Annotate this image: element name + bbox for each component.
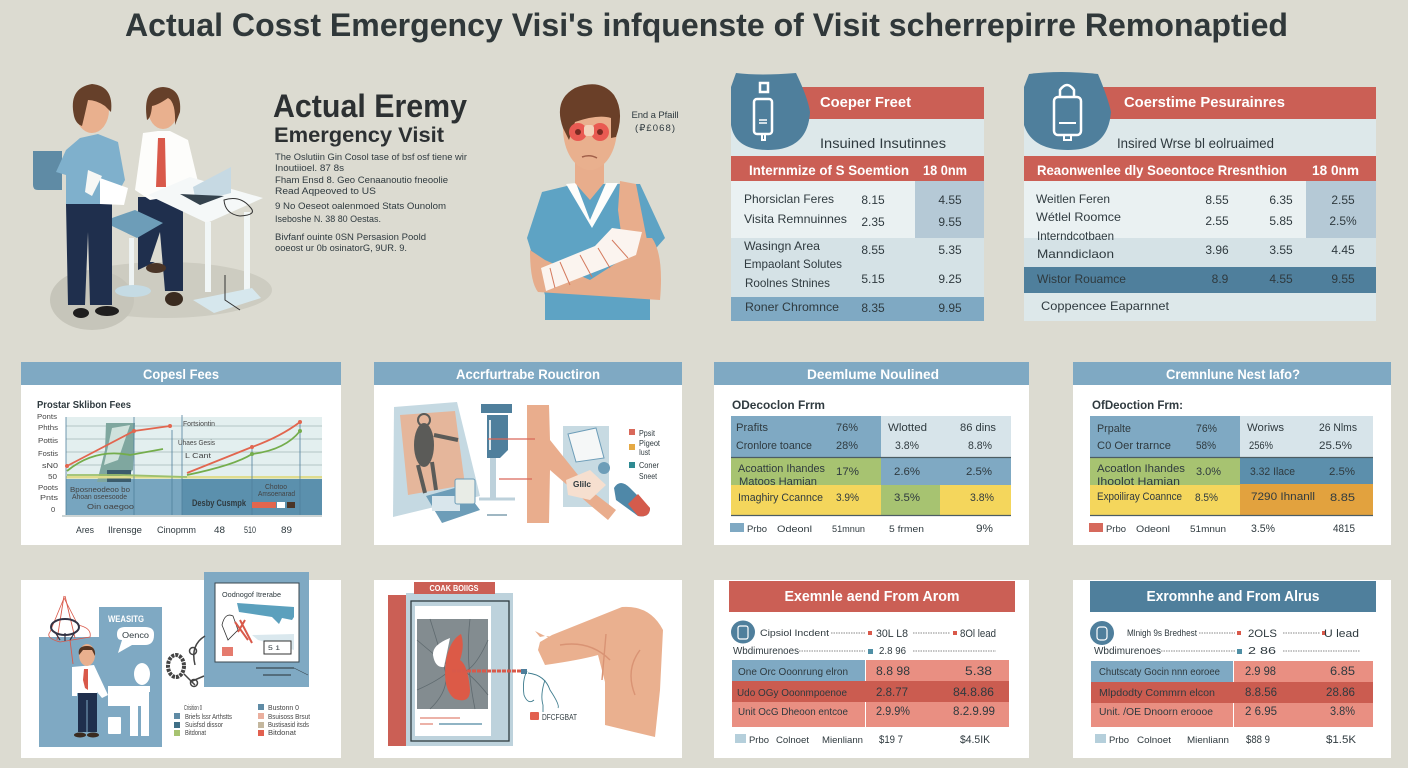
panel: coverage pressures table: Wétlel Roomce: [1036, 210, 1121, 224]
panel: example table blue: Mlpdodty Commrn elcon: [1099, 687, 1215, 699]
panel: coverage pressures table: Wistor Rouamce: [1037, 272, 1126, 286]
panel: deductible table right: 3.32 Ilace: [1250, 466, 1295, 478]
panel: coverage pressures table: 5.85: [1269, 214, 1293, 228]
panel: scan and arm illustration: [374, 580, 682, 758]
table legend: [1095, 734, 1357, 746]
panel: deductible table right: Cremnlune Nest Iafo?: [1166, 366, 1300, 382]
panel: deductible table left: ODecoclon Frrm: [732, 398, 825, 412]
panel: example table red: One Orc Ooonrung elron: [738, 666, 848, 678]
table legend: 51mnun: [1190, 524, 1226, 535]
illustration: scan document: [388, 582, 527, 746]
panel: deductible table left: 28%: [836, 440, 858, 452]
table legend: 9%: [976, 523, 993, 535]
panel: copper fees table: 5.35: [938, 243, 962, 257]
y axis labels: Pnts: [40, 493, 58, 502]
panel: copper fees table: 9.25: [938, 272, 962, 286]
line chart: Chotoo: [265, 482, 287, 491]
table legend: 5 frmen: [889, 524, 924, 535]
legend: Pigeot: [639, 438, 661, 448]
illustration: forearm: [535, 607, 663, 737]
panel: copper fees table: 9.55: [938, 215, 962, 229]
icon: tube: [523, 671, 558, 712]
panel: copper fees table: Coeper Freet: [820, 94, 911, 111]
panel: acute reaction illustration: [374, 362, 682, 545]
panel: example table red: 30L L8: [876, 628, 908, 640]
text block: description: [275, 152, 467, 253]
table legend: Mienliann: [1187, 735, 1229, 746]
panel: deductible table right: Prpalte: [1097, 423, 1131, 435]
panel: deductible table right: 76%: [1196, 423, 1217, 435]
panel: coverage pressures table: 3.96: [1205, 243, 1229, 257]
panel: deductible table left: 17%: [836, 466, 859, 478]
panel: example table blue: 28.86: [1326, 687, 1355, 699]
illustration: man at a sink: Oenco: [122, 630, 149, 640]
panel: deductible table right: 26 Nlms: [1319, 422, 1357, 434]
panel: example table blue: 2 6.95: [1245, 706, 1277, 718]
panel: copper fees table: 8.35: [861, 301, 885, 315]
icon: bag badge: [731, 620, 755, 644]
panel: deductible table left: [714, 362, 1029, 545]
panel: example table blue: Wbdimurenoes: [1094, 646, 1161, 657]
panel: example table red: 8Ol lead: [960, 628, 996, 640]
illustration: staff at a desk: [33, 84, 272, 330]
panel: deductible table left: Imaghiry Ccannce: [738, 492, 823, 504]
icon: chain link: [168, 636, 205, 686]
panel: deductible table left: 3.9%: [836, 492, 859, 504]
panel: coverage pressures table: 8.9: [1212, 272, 1229, 286]
panel: deductible table right: 25.5%: [1319, 440, 1352, 452]
panel: coverage pressures table: Reaonwenlee dly Soeontoce Rresnthion: [1037, 162, 1287, 178]
table legend: Odeonl: [777, 524, 812, 535]
table legend: Prbo: [1109, 735, 1129, 746]
illustration: arm: Glilc: [573, 479, 591, 489]
patient label: (₽£068): [635, 123, 675, 134]
x axis labels: 510: [244, 525, 256, 535]
panel: example table red: 2.9.9%: [876, 706, 910, 718]
y axis labels: Poots: [38, 483, 58, 492]
panel: coverage pressures table: 2.5%: [1329, 214, 1357, 228]
panel: deductible table right: 8.5%: [1195, 492, 1218, 504]
legend: Ppsit: [639, 428, 656, 438]
panel: example table red: Cipsiol Incdent: [760, 628, 829, 639]
panel: copper fees table: Internmize of S Soemtion: [749, 162, 909, 178]
table legend: Mienliann: [822, 735, 863, 746]
panel: example table blue: Mlnigh 9s Bredhest: [1127, 628, 1197, 639]
legend: Briefs lssr Arthstts: [185, 712, 232, 721]
line chart: Oin oaegoo: [87, 502, 134, 511]
panel: deductible table right: 2.5%: [1329, 466, 1355, 478]
panel: copay fees chart: Prostar Sklibon Fees: [37, 400, 131, 411]
panel: copper fees table: Visita Remnuinnes: [744, 212, 847, 226]
panel: deductible table left: 8.8%: [968, 440, 992, 452]
panel: example table blue: 8.8.56: [1245, 687, 1277, 699]
panel: deductible table left: 2.5%: [966, 466, 992, 478]
table legend: $4.5IK: [960, 734, 991, 746]
callout: [530, 712, 577, 722]
text block: description: 9 No Oeseot oalenmoed Stats Ounolom: [275, 201, 446, 211]
line chart: Bposneodeoo bo: [70, 485, 130, 494]
legend: Bitdonat: [185, 728, 207, 737]
legend: [629, 428, 661, 481]
icon: iv bag shield: [731, 73, 810, 150]
panel: deductible table left: Acoattion Ihandes: [738, 463, 825, 475]
panel: coverage pressures table: 18 0nm: [1312, 162, 1359, 178]
illustration: injured patient: [527, 84, 665, 320]
panel: example table blue: 3.8%: [1330, 706, 1355, 718]
heading: actual emergency visit: [273, 88, 467, 147]
panel: copay fees chart: [21, 362, 341, 545]
panel: example table red: Wbdimurenoes: [733, 646, 799, 657]
x axis labels: 89: [281, 525, 292, 535]
panel: coverage pressures table: Coerstime Pesurainres: [1124, 94, 1285, 111]
panel: example table red: Udo OGy Ooonmpoenoe: [737, 687, 847, 699]
panel: deductible table right: 7290 Ihnanll: [1251, 491, 1315, 503]
table legend: [1089, 523, 1355, 535]
panel: coverage pressures table: Insired Wrse bl eolruaimed: [1117, 135, 1274, 151]
table legend: 4815: [1333, 523, 1355, 535]
legend: Bustisasid itsds: [268, 720, 309, 729]
table legend: Prbo: [749, 735, 769, 746]
panel: deductible table left: 76%: [836, 422, 858, 434]
panel: deductible table left: Matoos Hamian: [739, 476, 817, 488]
panel: coverage pressures table: 4.55: [1269, 272, 1293, 286]
panel: deductible table right: C0 Oer trarnce: [1097, 440, 1171, 452]
panel: example table red: Exemnle aend From Arom: [784, 588, 960, 605]
panel: copper fees table: 18 0nm: [923, 162, 967, 178]
panel: coverage pressures table: 2.55: [1331, 193, 1355, 207]
line chart: L Cant: [185, 451, 212, 460]
y axis labels: Ponts: [37, 412, 57, 421]
panel: deductible table right: Woriws: [1247, 422, 1285, 434]
illustration: man at a sink: WEASITG: [108, 614, 144, 624]
x axis labels: 48: [214, 525, 225, 535]
panel: copper fees table: Insuined Insutinnes: [820, 135, 946, 151]
panel: copper fees table: Roner Chromnce: [745, 300, 839, 314]
illustration: man at a sink: [39, 596, 162, 747]
legend: [174, 703, 311, 737]
panel: deductible table left: Cronlore toance: [736, 440, 812, 452]
text block: description: Fham Ensd 8. Geo Cenaanoutio fneoolie: [275, 175, 448, 185]
table legend: [735, 734, 991, 746]
callout: DFCFGBAT: [542, 713, 577, 722]
panel: deductible table right: Acoatlon Ihandes: [1097, 463, 1186, 475]
panel: deductible table left: 3.8%: [895, 440, 919, 452]
panel: example table red: 8.8 98: [876, 666, 910, 678]
line chart: Amsoenarad: [258, 489, 295, 498]
panel: example table red: 84.8.86: [953, 687, 994, 699]
panel: example table red: Unit OcG Dheoon entcoe: [738, 706, 848, 718]
table legend: Colnoet: [1137, 735, 1171, 746]
y axis labels: sN0: [42, 461, 58, 470]
panel: deductible table right: 58%: [1196, 440, 1216, 452]
table legend: $19 7: [879, 734, 903, 746]
panel: coverage pressures table: 2.55: [1205, 214, 1229, 228]
heading: actual emergency visit: Actual Eremy: [273, 88, 467, 124]
legend: Sneet: [639, 471, 658, 481]
panel: person and chart illustration: [21, 572, 341, 758]
legend: Bustonn 0: [268, 703, 299, 712]
panel: deductible table left: Wlotted: [888, 422, 927, 434]
panel: copper fees table: Phorsiclan Feres: [744, 192, 834, 206]
panel: copper fees table: Roolnes Stnines: [745, 276, 830, 290]
panel: example table blue: Chutscaty Gocin nnn eoroee: [1099, 666, 1220, 678]
panel: deductible table left: Prafits: [736, 422, 768, 434]
x axis labels: Cinopmm: [157, 525, 196, 535]
panel: example table red: 2.8.77: [876, 687, 908, 699]
illustration: chart board: 5 1: [268, 646, 281, 652]
panel: copper fees table: 8.55: [861, 243, 885, 257]
panel: example table blue: [1073, 580, 1391, 758]
panel: copper fees table: 4.55: [938, 193, 962, 207]
illustration: chart board: [204, 572, 309, 687]
line chart: Fortsiontin: [183, 419, 215, 428]
x axis labels: [76, 525, 292, 535]
panel: coverage pressures table: 4.45: [1331, 243, 1355, 257]
panel: example table blue: Unit. /OE Dnoorn eroooe: [1099, 706, 1213, 718]
panel: example table blue: 2OLS: [1248, 628, 1277, 640]
panel: example table blue: 2.9 98: [1245, 666, 1276, 678]
panel: coverage pressures table: 8.55: [1205, 193, 1229, 207]
panel: example table blue: Exromnhe and From Alrus: [1146, 588, 1320, 605]
table legend: Colnoet: [776, 735, 809, 746]
panel: acute reaction illustration: Accrfurtrabe Rouctiron: [456, 366, 600, 382]
table legend: 51mnun: [832, 524, 865, 535]
panel: example table red: 5.38: [965, 666, 992, 678]
patient label: End a Pfaill: [632, 110, 678, 121]
panel: deductible table left: Deemlume Noulined: [807, 366, 939, 382]
panel: copper fees table: 5.15: [861, 272, 885, 286]
text block: description: Iseboshe N. 38 80 Oestas.: [275, 214, 381, 224]
table legend: Prbo: [1106, 524, 1126, 535]
panel: copper fees table: 2.35: [861, 215, 885, 229]
panel: example table blue: U lead: [1324, 628, 1359, 640]
line chart: [62, 415, 322, 516]
legend: Suisfsd dissor: [185, 720, 223, 729]
icon: bag badge: [1090, 621, 1114, 645]
panel: copper fees table: 8.15: [861, 193, 885, 207]
panel: deductible table right: [1073, 362, 1391, 545]
table legend: 3.5%: [1251, 523, 1275, 535]
panel: deductible table right: OfDeoction Frm:: [1092, 398, 1183, 412]
line chart: Desby Cusmpk: [192, 498, 247, 508]
panel: deductible table left: 3.5%: [894, 492, 920, 504]
table legend: Prbo: [747, 524, 767, 535]
panel: coverage pressures table: Interndcotbaen: [1037, 229, 1114, 243]
panel: deductible table left: 2.6%: [894, 466, 920, 478]
legend: Bsuisoss Brsut: [268, 712, 311, 721]
panel: example table blue: 6.85: [1330, 666, 1355, 678]
panel: copper fees table: [731, 73, 984, 321]
panel: deductible table right: 256%: [1249, 440, 1273, 452]
illustration: chart board: Oodnogof Itrerabe: [222, 590, 281, 599]
illustration: arm: [488, 405, 650, 523]
y axis labels: 50: [48, 472, 57, 481]
legend: Iust: [639, 447, 651, 457]
panel: copper fees table: 9.95: [938, 301, 962, 315]
text block: description: The Oslutiin Gin Cosol tase of bsf osf tiene wir: [275, 152, 467, 162]
panel: coverage pressures table: Coppencee Eaparnnet: [1041, 299, 1170, 313]
table legend: [730, 523, 993, 535]
panel: copper fees table: Empaolant Solutes: [744, 257, 842, 271]
x axis labels: Ares: [76, 525, 94, 535]
y axis labels: 0: [51, 505, 55, 514]
text block: description: Bivfanf ouinte 0SN Persasion Poold: [275, 232, 426, 242]
panel: deductible table right: 3.0%: [1196, 466, 1221, 478]
panel: example table red: [714, 580, 1029, 758]
panel: deductible table left: 86 dins: [960, 422, 996, 434]
legend: Bitdonat: [268, 728, 297, 737]
panel: deductible table right: 8.85: [1330, 492, 1355, 504]
table legend: Odeonl: [1136, 524, 1170, 535]
panel: deductible table left: 3.8%: [970, 492, 994, 504]
y axis labels: [37, 412, 58, 514]
text block: description: Read Aqpeoved to US: [275, 186, 376, 196]
panel: coverage pressures table: [1024, 72, 1376, 321]
illustration: poster and scan: [393, 402, 515, 523]
line chart: Ahoan oseesoode: [72, 492, 127, 501]
patient label: [632, 110, 678, 134]
panel: example table red: 2.8 96: [879, 646, 906, 657]
illustration: scan document: COAK BOIIGS: [430, 584, 479, 593]
text block: description: Inoutiioel. 87 8s: [275, 163, 345, 173]
x axis labels: Ilrensge: [108, 525, 142, 535]
panel: example table blue: 2 86: [1248, 646, 1277, 657]
legend: Crisition 0: [184, 703, 202, 712]
table legend: $88 9: [1246, 734, 1270, 746]
panel: deductible table right: Expoiliray Coannce: [1097, 491, 1182, 503]
y axis labels: Pottis: [38, 436, 58, 445]
panel: coverage pressures table: 3.55: [1269, 243, 1293, 257]
heading: actual emergency visit: Emergency Visit: [274, 124, 444, 147]
table legend: $1.5K: [1326, 734, 1357, 746]
panel: coverage pressures table: Manndiclaon: [1037, 247, 1114, 261]
title: Actual Cosst Emergency Visi's infquenste of Visit scherrepirre Remonaptied: [125, 7, 1288, 43]
y axis labels: Fostis: [38, 449, 58, 458]
legend: Coner: [639, 460, 659, 470]
text block: description: ooeost ur 0b osinatorG, 9UR. 9.: [275, 243, 407, 253]
panel: example table red: 8.2.9.99: [953, 706, 995, 718]
y axis labels: Phths: [38, 423, 58, 432]
line chart: Uhaes Gesis: [178, 438, 215, 447]
panel: copay fees chart: Copesl Fees: [143, 366, 219, 382]
icon: iv bag shield: [1024, 72, 1111, 150]
panel: coverage pressures table: 9.55: [1331, 272, 1355, 286]
panel: coverage pressures table: Weitlen Feren: [1036, 192, 1110, 206]
panel: coverage pressures table: 6.35: [1269, 193, 1293, 207]
panel: deductible table right: Ihoolot Hamian: [1097, 476, 1180, 488]
panel: copper fees table: Wasingn Area: [744, 239, 820, 253]
